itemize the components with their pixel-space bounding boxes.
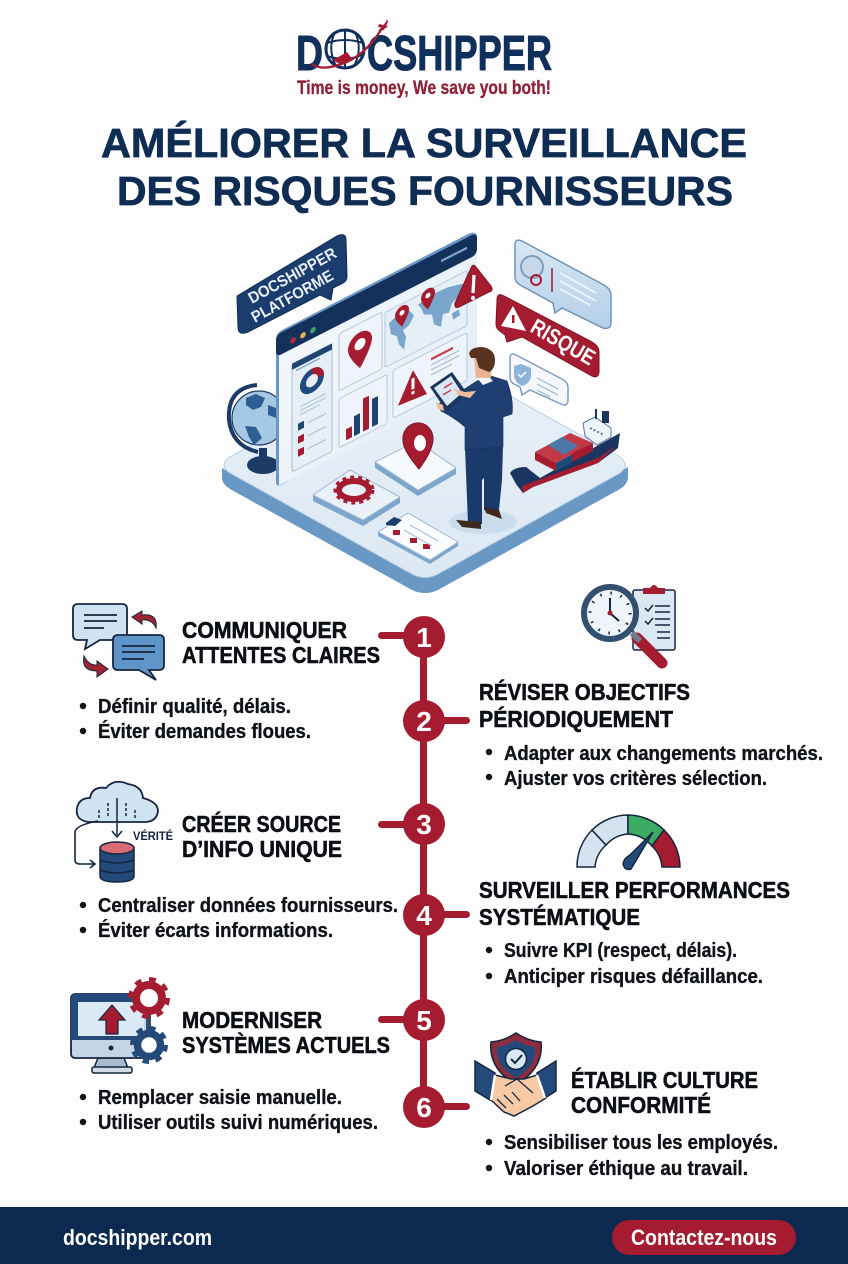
title bbox=[101, 120, 747, 214]
panel: step 4 monitor bbox=[479, 815, 790, 988]
heading: step 6: ÉTABLIR CULTURE bbox=[571, 1066, 758, 1093]
heading: step 3: D’INFO UNIQUE bbox=[182, 836, 342, 862]
icon: clock magnifier and checklist bbox=[584, 585, 675, 663]
panel: bar chart bbox=[339, 374, 387, 448]
jacket bbox=[438, 376, 512, 450]
panel: step 1 communicate bbox=[73, 604, 380, 743]
bullets: step 6: Sensibiliser tous les employés. bbox=[504, 1131, 778, 1154]
bullets: step 6: Valoriser éthique au travail. bbox=[504, 1157, 748, 1180]
tile: gear bbox=[313, 470, 400, 526]
bubble: DocShipper platform bbox=[237, 235, 347, 333]
bullets: step 1: Éviter demandes floues. bbox=[98, 720, 311, 743]
icon: cloud and database: VÉRITÉ bbox=[133, 830, 173, 843]
bullets: step 4 bbox=[486, 939, 763, 988]
bubble: DocShipper platform: DOCSHIPPER bbox=[246, 245, 340, 307]
icon: shield and handshake bbox=[475, 1033, 556, 1116]
step 2 marker bbox=[403, 700, 470, 742]
bubble: magnifier report bbox=[515, 240, 611, 328]
bubble: DocShipper platform: PLATFORME bbox=[249, 267, 337, 326]
heading: step 4: SYSTÉMATIQUE bbox=[479, 903, 640, 930]
bubble: RISQUE alert bbox=[496, 295, 600, 377]
bullets: step 3: Éviter écarts informations. bbox=[98, 919, 333, 942]
panel: step 6 culture bbox=[475, 1033, 778, 1180]
timeline spine bbox=[420, 636, 427, 1108]
contact button: Contactez-nous bbox=[631, 1225, 777, 1250]
logo bbox=[296, 19, 552, 99]
icon: globe bbox=[229, 385, 286, 474]
icon: performance gauge bbox=[577, 815, 680, 869]
contact button bbox=[612, 1220, 796, 1255]
icon: logo globe and plane bbox=[312, 19, 388, 68]
panel: world map bbox=[385, 269, 467, 367]
step 4 marker bbox=[403, 894, 470, 936]
footer website: docshipper.com bbox=[63, 1225, 212, 1250]
heading: step 4: SURVEILLER PERFORMANCES bbox=[479, 877, 790, 903]
timeline bbox=[378, 616, 470, 1128]
heading: step 5: SYSTÈMES ACTUELS bbox=[182, 1031, 390, 1058]
bullets: step 2 bbox=[486, 742, 823, 790]
bullets: step 2: Ajuster vos critères sélection. bbox=[504, 767, 767, 790]
tile: clipboard checklist bbox=[378, 513, 458, 564]
step 6 marker: 6 bbox=[416, 1092, 432, 1123]
heading: step 1 bbox=[182, 617, 380, 668]
bubble: RISQUE alert: RISQUE bbox=[526, 314, 600, 370]
panel: step 2 review bbox=[479, 585, 823, 790]
bullets: step 5 bbox=[80, 1086, 378, 1134]
icon: cloud and database bbox=[75, 782, 173, 882]
bullets: step 3 bbox=[80, 894, 398, 942]
step 3 marker bbox=[378, 803, 445, 845]
panel: location pin bbox=[339, 312, 382, 391]
footer bar bbox=[0, 1207, 848, 1264]
bullets: step 5: Utiliser outils suivi numériques. bbox=[98, 1111, 378, 1134]
tablet bbox=[430, 372, 467, 412]
title: DES RISQUES FOURNISSEURS bbox=[117, 168, 733, 214]
bullets: step 5: Remplacer saisie manuelle. bbox=[98, 1086, 342, 1109]
heading: step 2 bbox=[479, 678, 690, 732]
icon: chat bubbles bbox=[73, 604, 164, 680]
step 5 marker bbox=[378, 999, 445, 1041]
illustration: risk monitoring platform bbox=[222, 232, 628, 593]
head bbox=[474, 358, 492, 378]
step 5 marker: 5 bbox=[416, 1005, 432, 1036]
platform base bbox=[222, 353, 628, 593]
bullets: step 6 bbox=[486, 1131, 778, 1180]
bullets: step 4: Anticiper risques défaillance. bbox=[504, 965, 763, 988]
bullets: step 1: Définir qualité, délais. bbox=[98, 695, 291, 718]
heading: step 1: ATTENTES CLAIRES bbox=[182, 642, 380, 668]
heading: step 2: PÉRIODIQUEMENT bbox=[479, 705, 674, 732]
bullets: step 2: Adapter aux changements marchés. bbox=[504, 742, 823, 765]
panel: step 3 single source bbox=[75, 782, 398, 942]
title: AMÉLIORER LA SURVEILLANCE bbox=[101, 120, 747, 166]
step 3 marker: 3 bbox=[416, 809, 432, 840]
logo wordmark bbox=[296, 27, 552, 81]
panel: sidebar with donut bbox=[292, 343, 332, 472]
bullets: step 3: Centraliser données fournisseurs. bbox=[98, 894, 398, 917]
icon: container ship bbox=[510, 409, 620, 493]
panel: step 5 modernize bbox=[71, 979, 390, 1134]
legs bbox=[465, 445, 503, 524]
step 4 marker: 4 bbox=[416, 900, 432, 931]
step 6 marker bbox=[403, 1086, 470, 1128]
shoes bbox=[456, 507, 502, 529]
icon: warning triangle on screen bbox=[455, 265, 492, 308]
logo wordmark: CSHIPPER bbox=[367, 27, 552, 81]
step 1 marker bbox=[378, 616, 445, 658]
heading: step 3: CRÉER SOURCE bbox=[182, 810, 341, 837]
logo wordmark: D bbox=[296, 27, 323, 81]
bullets: step 4: Suivre KPI (respect, délais). bbox=[504, 939, 737, 962]
heading: step 6: CONFORMITÉ bbox=[571, 1091, 711, 1118]
step 1 marker: 1 bbox=[416, 622, 432, 653]
heading: step 1: COMMUNIQUER bbox=[182, 617, 347, 643]
logo tagline: Time is money, We save you both! bbox=[297, 77, 551, 99]
icon: monitor with gears bbox=[71, 979, 168, 1073]
heading: step 5: MODERNISER bbox=[182, 1007, 322, 1033]
heading: step 3 bbox=[182, 810, 342, 862]
tile: map pin bbox=[375, 423, 456, 496]
heading: step 4 bbox=[479, 877, 790, 930]
dashboard screen bbox=[276, 232, 477, 487]
bubble: shield check bbox=[510, 354, 568, 405]
heading: step 6 bbox=[571, 1066, 758, 1118]
bullets: step 1 bbox=[80, 695, 311, 743]
step 2 marker: 2 bbox=[416, 706, 432, 737]
heading: step 2: RÉVISER OBJECTIFS bbox=[479, 678, 690, 705]
panel: alert bbox=[393, 333, 467, 418]
hands bbox=[436, 389, 476, 411]
heading: step 5 bbox=[182, 1007, 390, 1058]
person with tablet bbox=[430, 347, 517, 534]
